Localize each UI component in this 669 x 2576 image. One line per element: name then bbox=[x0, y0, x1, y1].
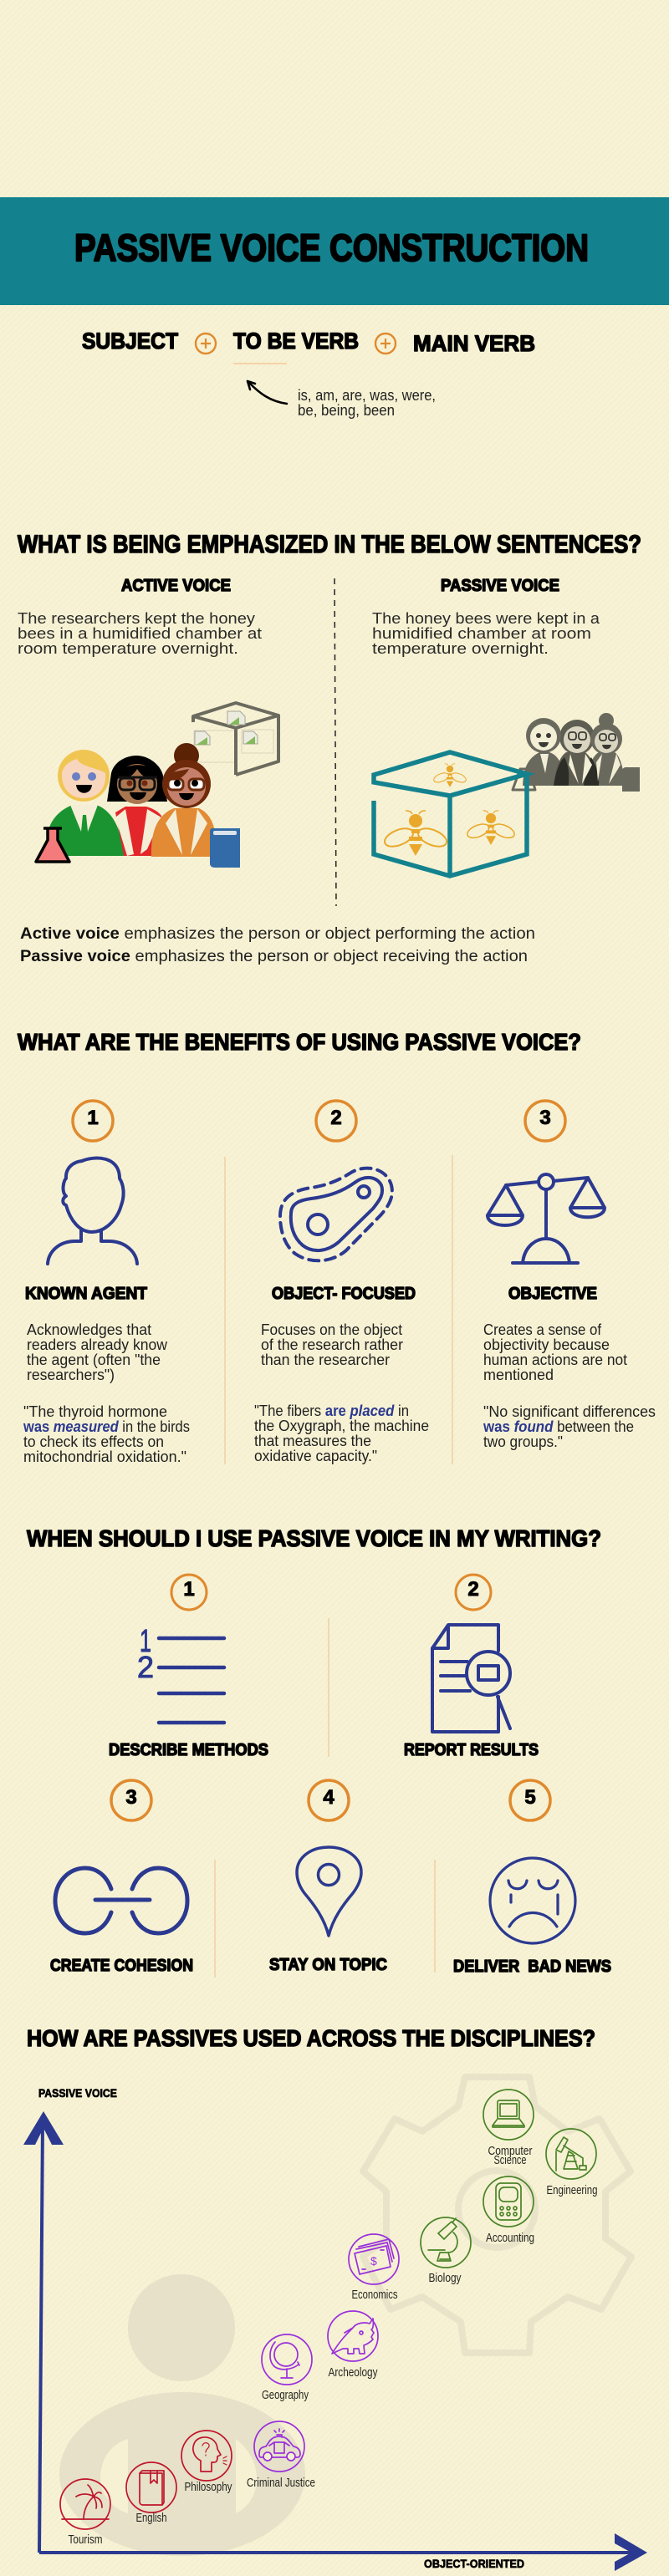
benefit example: that measures the bbox=[254, 1433, 371, 1449]
icon: chain link bbox=[55, 1868, 187, 1933]
illustration: gray cube with image placeholders bbox=[193, 703, 278, 775]
number badge 1 bbox=[171, 1575, 207, 1610]
title banner bbox=[0, 197, 669, 305]
benefit description: than the researcher bbox=[261, 1352, 390, 1368]
benefit title: object focused: OBJECT- FOCUSED bbox=[272, 1285, 416, 1303]
x axis label: OBJECT-ORIENTED bbox=[424, 2557, 524, 2570]
benefit description bbox=[483, 1321, 627, 1383]
researcher: orange suit bbox=[151, 743, 216, 857]
icon: map pin bbox=[297, 1847, 361, 1936]
discipline: tourism: Tourism bbox=[69, 2533, 102, 2547]
icon: numbered list: 2 bbox=[137, 1650, 154, 1684]
benefit example: "No significant differences bbox=[483, 1403, 656, 1420]
y axis with arrow bbox=[23, 2111, 64, 2553]
benefit description: the agent (often "the bbox=[27, 1352, 161, 1368]
number badge 1: 1 bbox=[183, 1578, 195, 1601]
benefit example: was found between the bbox=[483, 1418, 634, 1435]
number badge 4 bbox=[309, 1780, 349, 1820]
benefit description: Focuses on the object bbox=[261, 1321, 402, 1338]
discipline: archeology: Archeology bbox=[328, 2366, 378, 2380]
active sentence: The researchers kept the honey bbox=[18, 609, 256, 627]
benefit description: researchers") bbox=[27, 1367, 115, 1383]
discipline: geography: Geography bbox=[262, 2389, 309, 2402]
number badge 2 bbox=[456, 1575, 491, 1610]
formula term: subject: SUBJECT bbox=[82, 328, 178, 354]
label: REPORT RESULTS bbox=[404, 1741, 539, 1759]
discipline: accounting bbox=[483, 2176, 534, 2245]
benefit example bbox=[483, 1403, 656, 1450]
panel: benefit 2 object focused bbox=[254, 1101, 429, 1464]
formula: passive voice construction bbox=[82, 328, 535, 419]
benefit example: mitochondrial oxidation." bbox=[23, 1448, 186, 1465]
discipline: biology bbox=[421, 2217, 471, 2285]
researcher: red suit bbox=[107, 756, 167, 856]
benefit title: objective: OBJECTIVE bbox=[508, 1285, 597, 1303]
takeaway: voice definitions: Active voice emphasizes the person or object performing the action bbox=[20, 925, 535, 943]
watermark: person bbox=[59, 2274, 305, 2556]
active sentence: room temperature overnight. bbox=[18, 639, 238, 657]
passive sentence: humidified chamber at room bbox=[372, 624, 591, 642]
number badge 2 bbox=[316, 1101, 356, 1141]
benefit description: human actions are not bbox=[483, 1352, 627, 1368]
use case 3 create cohesion bbox=[50, 1780, 193, 1975]
benefit description: objectivity because bbox=[483, 1336, 610, 1353]
icon: meat cut bbox=[280, 1168, 392, 1260]
number badge 5 bbox=[510, 1780, 550, 1820]
icon: plus bbox=[375, 333, 396, 354]
arrow: to be verb examples bbox=[248, 381, 287, 404]
title: PASSIVE VOICE CONSTRUCTION bbox=[74, 227, 589, 269]
benefit title: known agent: KNOWN AGENT bbox=[25, 1285, 147, 1303]
subheading: active voice: ACTIVE VOICE bbox=[121, 577, 231, 595]
benefit example bbox=[254, 1403, 429, 1464]
illustration: gray researchers bbox=[513, 713, 640, 792]
subheading: passive voice: PASSIVE VOICE bbox=[441, 577, 559, 595]
benefit description bbox=[261, 1321, 403, 1368]
icon: flask bbox=[36, 828, 69, 862]
heading: across disciplines: HOW ARE PASSIVES USED ACROSS THE DISCIPLINES? bbox=[27, 2025, 595, 2051]
y axis label: PASSIVE VOICE bbox=[38, 2086, 117, 2100]
formula term: to be verb: TO BE VERB bbox=[233, 328, 359, 354]
center dashed divider bbox=[334, 578, 336, 906]
illustration: researchers bbox=[36, 743, 240, 868]
number badge 2: 2 bbox=[467, 1578, 479, 1601]
label: STAY ON TOPIC bbox=[269, 1956, 387, 1974]
discipline: computer science: Computer bbox=[488, 2145, 533, 2158]
number badge 3 bbox=[111, 1780, 151, 1820]
discipline: economics bbox=[349, 2234, 399, 2302]
panel: passive voice bbox=[372, 577, 640, 876]
heading: when to use: WHEN SHOULD I USE PASSIVE VOICE IN MY WRITING? bbox=[27, 1525, 601, 1551]
passive sentence: The honey bees were kept in a bbox=[372, 609, 600, 627]
takeaway: voice definitions bbox=[20, 925, 535, 965]
passive sentence: temperature overnight. bbox=[372, 639, 549, 657]
takeaway: voice definitions: Passive voice emphasizes the person or object receiving the action bbox=[20, 948, 528, 965]
to be verb list: be, being, been bbox=[298, 402, 395, 419]
chart: passives across disciplines bbox=[23, 2077, 647, 2571]
discipline: computer science: Science bbox=[493, 2154, 527, 2167]
icon: scales bbox=[488, 1174, 605, 1263]
discipline: criminal justice: Criminal Justice bbox=[247, 2477, 315, 2490]
panel: benefit 1 known agent bbox=[23, 1101, 190, 1465]
heading: benefits: WHAT ARE THE BENEFITS OF USING PASSIVE VOICE? bbox=[18, 1029, 581, 1055]
panel: active voice bbox=[18, 577, 278, 868]
discipline: accounting: Accounting bbox=[486, 2232, 534, 2245]
benefit example: "The fibers are placed in bbox=[254, 1403, 409, 1419]
number badge 2: 2 bbox=[330, 1107, 342, 1129]
icon: numbered list: 1 bbox=[140, 1624, 151, 1659]
researcher: green suit bbox=[49, 750, 124, 856]
discipline: computer science bbox=[483, 2090, 534, 2167]
use case 1 describe methods bbox=[109, 1575, 268, 1759]
benefit example: two groups." bbox=[483, 1433, 563, 1450]
discipline: criminal justice bbox=[247, 2421, 315, 2490]
discipline: tourism bbox=[60, 2479, 110, 2547]
icon: numbered list bbox=[137, 1624, 224, 1723]
benefit description: mentioned bbox=[483, 1367, 554, 1383]
number badge 3 bbox=[525, 1101, 565, 1141]
number badge 3: 3 bbox=[125, 1786, 137, 1809]
label: DELIVER BAD NEWS bbox=[453, 1957, 611, 1976]
number badge 3: 3 bbox=[539, 1107, 551, 1129]
benefit example: was measured in the birds bbox=[23, 1418, 190, 1435]
discipline: geography bbox=[262, 2334, 312, 2402]
panel: benefit 3 objective bbox=[483, 1101, 656, 1450]
discipline: engineering: Engineering bbox=[547, 2184, 597, 2197]
use case 5 deliver bad news bbox=[453, 1780, 611, 1976]
use case 4 stay on topic bbox=[269, 1780, 387, 1974]
illustration: bee cube bbox=[374, 752, 527, 876]
formula term: main verb: MAIN VERB bbox=[413, 331, 535, 356]
number badge 5: 5 bbox=[524, 1786, 536, 1809]
number badge 1: 1 bbox=[87, 1107, 99, 1129]
discipline: engineering bbox=[546, 2129, 597, 2197]
use case 2 report results bbox=[404, 1575, 539, 1759]
icon: bee right bbox=[466, 811, 516, 845]
discipline: english: English bbox=[135, 2512, 167, 2525]
benefit description: readers already know bbox=[27, 1336, 168, 1353]
discipline: philosophy bbox=[181, 2431, 232, 2494]
discipline: archeology bbox=[328, 2311, 378, 2380]
benefit example: to check its effects on bbox=[23, 1433, 164, 1450]
active sentence: bees in a humidified chamber at bbox=[18, 624, 262, 642]
benefit example: the Oxygraph, the machine bbox=[254, 1418, 429, 1434]
discipline: economics: $ bbox=[370, 2254, 377, 2268]
number badge 1 bbox=[73, 1101, 113, 1141]
icon: document with magnifier bbox=[432, 1625, 510, 1732]
benefit example bbox=[23, 1403, 190, 1465]
icon: bee left bbox=[382, 811, 449, 856]
benefit example: "The thyroid hormone bbox=[23, 1403, 167, 1420]
icon: book bbox=[210, 828, 240, 868]
benefit description: Creates a sense of bbox=[483, 1321, 602, 1338]
benefit example: oxidative capacity." bbox=[254, 1448, 377, 1464]
discipline: economics: Economics bbox=[351, 2288, 398, 2302]
icon: sad face bbox=[490, 1858, 575, 1943]
x axis with arrow bbox=[39, 2533, 647, 2571]
label: CREATE COHESION bbox=[50, 1957, 193, 1975]
benefit description bbox=[27, 1321, 168, 1383]
number badge 4: 4 bbox=[323, 1786, 334, 1809]
to be verb list bbox=[298, 387, 436, 419]
to be verb list: is, am, are, was, were, bbox=[298, 387, 436, 404]
discipline: english bbox=[126, 2462, 176, 2525]
icon: bee top bbox=[432, 764, 467, 787]
active sentence bbox=[18, 609, 262, 657]
benefit description: of the research rather bbox=[261, 1336, 403, 1353]
benefit description: Acknowledges that bbox=[27, 1321, 151, 1338]
icon: person outline bbox=[48, 1158, 137, 1264]
watermark: gear bbox=[363, 2077, 631, 2353]
discipline: biology: Biology bbox=[428, 2272, 462, 2285]
passive sentence bbox=[372, 609, 600, 657]
icon: plus bbox=[196, 333, 216, 354]
discipline: philosophy: Philosophy bbox=[184, 2481, 232, 2494]
label: DESCRIBE METHODS bbox=[109, 1741, 268, 1759]
